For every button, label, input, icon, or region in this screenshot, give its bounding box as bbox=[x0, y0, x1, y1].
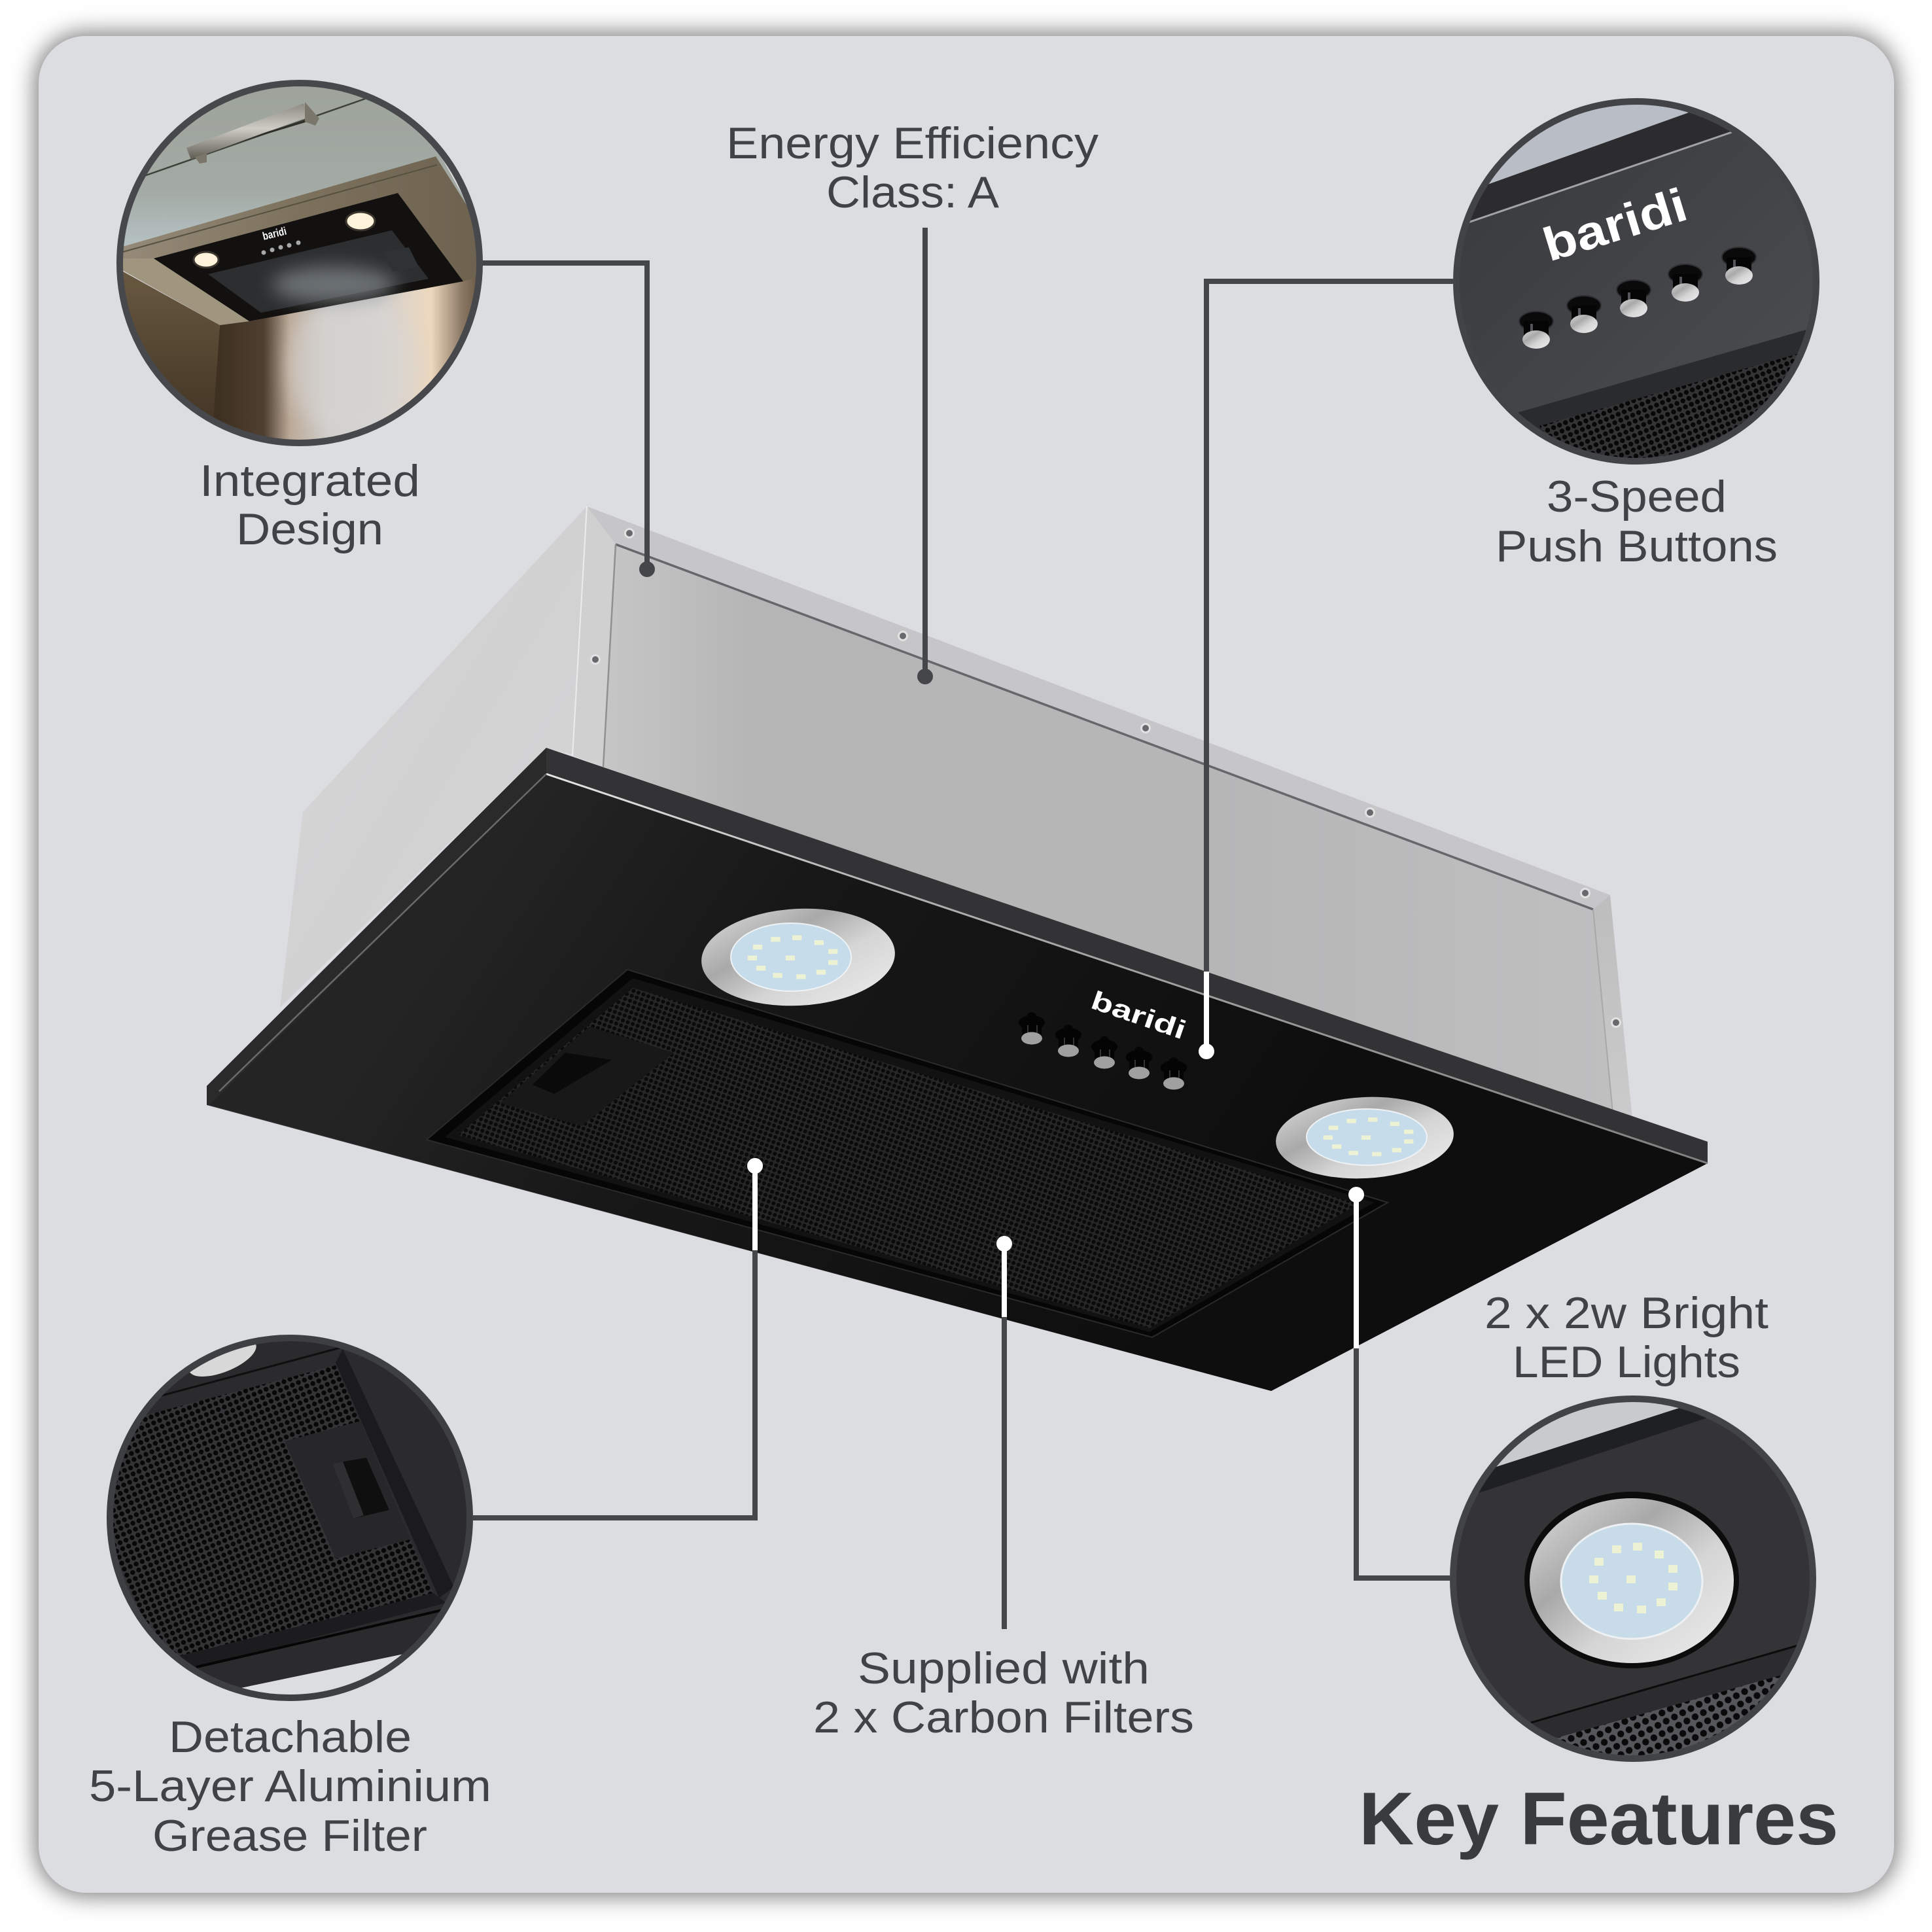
left chamfer bbox=[207, 748, 546, 1105]
circle: integrated design kitchen photo: baridi bbox=[261, 224, 288, 243]
hood steel frame bbox=[572, 506, 1632, 1119]
LED light right bbox=[1274, 1093, 1456, 1183]
label: push buttons bbox=[1496, 472, 1778, 571]
leader line: integrated design bbox=[482, 263, 655, 577]
label: grease filter bbox=[89, 1712, 491, 1861]
label: push buttons: Push Buttons bbox=[1496, 521, 1778, 571]
label: integrated design: Integrated bbox=[200, 456, 420, 506]
filter frame bbox=[445, 978, 1374, 1332]
label: energy efficiency bbox=[726, 118, 1098, 217]
label: carbon filters: Supplied with bbox=[858, 1643, 1150, 1693]
hood rear grey panel bbox=[603, 544, 1613, 1112]
grease filter mesh bbox=[458, 988, 1358, 1328]
black fascia face bbox=[209, 774, 1708, 1391]
leader line: carbon filters bbox=[996, 1236, 1012, 1629]
label: LED lights bbox=[1484, 1288, 1768, 1387]
circle: LED light close-up bbox=[1450, 1396, 1816, 1762]
label: energy efficiency: Class: A bbox=[826, 167, 1000, 217]
circle: push buttons close-up: baridi bbox=[1537, 179, 1693, 272]
filter recess bbox=[427, 970, 1388, 1337]
leader line: push buttons bbox=[1199, 281, 1453, 1059]
label: grease filter: Detachable bbox=[169, 1712, 412, 1762]
LED light left bbox=[699, 904, 898, 1011]
label: push buttons: 3-Speed bbox=[1547, 472, 1727, 521]
circle: grease filter close-up bbox=[107, 1335, 473, 1701]
leader line: grease filter bbox=[473, 1158, 763, 1518]
product: cooker hood bbox=[207, 506, 1708, 1391]
screws bbox=[591, 529, 1620, 1027]
frame inner edge bbox=[603, 544, 1613, 1112]
logo on hood: baridi bbox=[1087, 986, 1189, 1045]
label: grease filter: 5-Layer Aluminium bbox=[89, 1761, 491, 1811]
label: carbon filters bbox=[813, 1643, 1194, 1742]
label: LED lights: LED Lights bbox=[1513, 1337, 1740, 1387]
label: carbon filters: 2 x Carbon Filters bbox=[813, 1693, 1194, 1742]
label: integrated design bbox=[200, 456, 420, 554]
leader line: energy efficiency bbox=[917, 228, 933, 684]
label: LED lights: 2 x 2w Bright bbox=[1484, 1288, 1768, 1338]
black fascia rim bbox=[207, 748, 1708, 1391]
label: grease filter: Grease Filter bbox=[152, 1811, 427, 1861]
hood side panel bbox=[280, 506, 587, 1008]
label: energy efficiency: Energy Efficiency bbox=[726, 118, 1098, 168]
circle: integrated design kitchen photo bbox=[111, 72, 497, 458]
fascia highlight edges bbox=[219, 774, 1708, 1163]
hood push buttons bbox=[1019, 1012, 1187, 1090]
filter handle tab bbox=[500, 1027, 674, 1126]
leader line: LED lights bbox=[1348, 1187, 1450, 1578]
title: key features: Key Features bbox=[1359, 1778, 1838, 1861]
circle: push buttons close-up bbox=[1453, 98, 1819, 465]
label: integrated design: Design bbox=[236, 504, 383, 554]
